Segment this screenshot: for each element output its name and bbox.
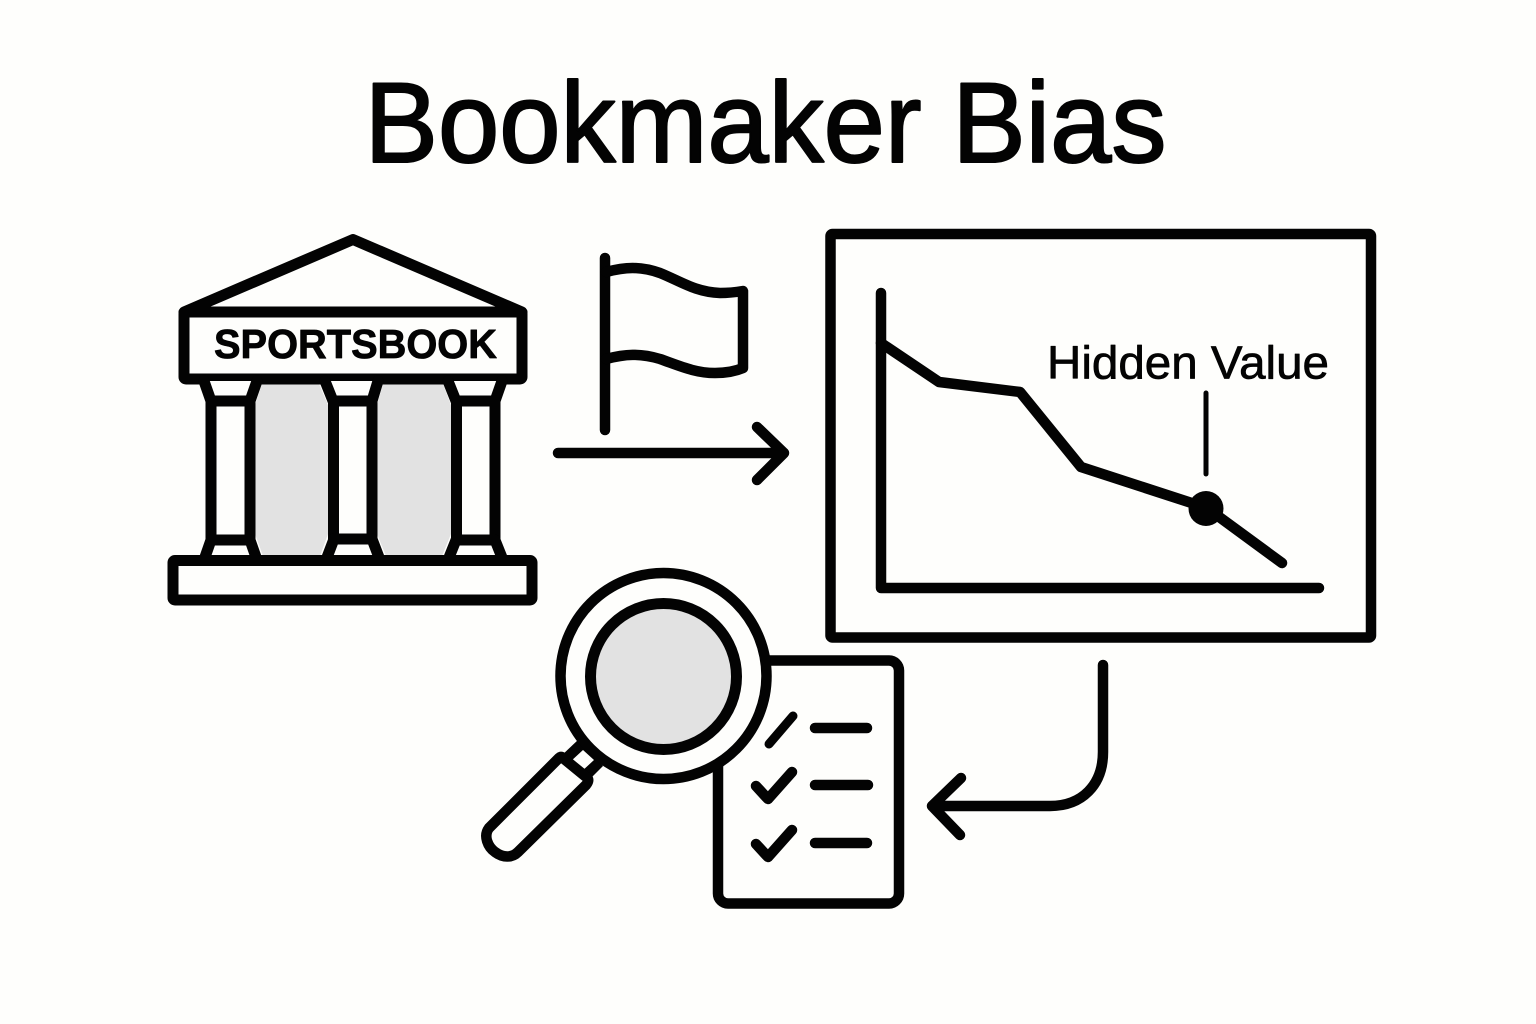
arrow: sportsbook to chart [558,427,784,480]
chart axes [881,293,1319,588]
callout line [1204,393,1208,474]
hidden value point [1188,491,1224,526]
icon: magnifying glass [486,573,766,856]
icon: sportsbook building [173,240,532,600]
chart line [881,343,1282,563]
label: sportsbook: SPORTSBOOK [214,321,497,367]
arrow: chart to checklist [932,665,1103,835]
title: Bookmaker Bias [364,60,1166,187]
hidden value label: Hidden Value [1047,336,1329,388]
chart panel [830,234,1371,638]
icon: flag [605,258,743,430]
icon: checklist [718,660,899,904]
